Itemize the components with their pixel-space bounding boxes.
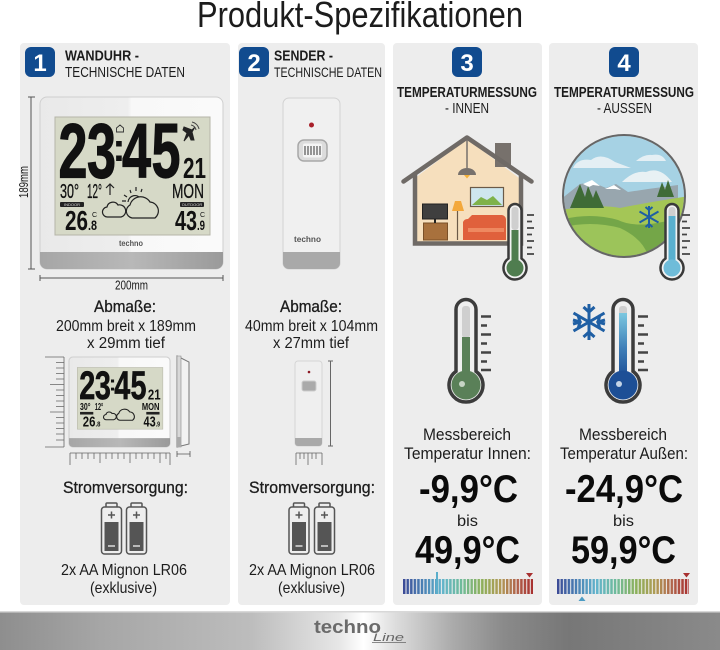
text: dimensions xyxy=(56,297,196,352)
text: battery type: 2x AA Mignon LR06 xyxy=(61,562,187,579)
clock readings: INDOOR xyxy=(64,202,80,207)
clock readings xyxy=(60,181,205,236)
clock readings: .8 xyxy=(88,217,97,233)
logo text on sensor: techno xyxy=(294,235,321,244)
colour scale xyxy=(403,572,533,594)
text: battery type xyxy=(61,562,187,597)
small sensor xyxy=(295,361,322,446)
icon: small thermometer green xyxy=(504,204,534,279)
small clock: 26 xyxy=(83,414,95,430)
icon: batteries xyxy=(102,503,146,554)
clock readings: .9 xyxy=(197,217,205,233)
value: min: -9,9°C xyxy=(419,468,518,511)
panel: Temperatur aussen xyxy=(549,43,698,605)
text: dimensions: x 27mm tief xyxy=(273,335,350,352)
ruler: width xyxy=(70,453,170,465)
small clock: 30° xyxy=(80,401,91,413)
clock readings: MON xyxy=(172,181,204,203)
heading: innen xyxy=(397,84,537,117)
logo text on clock: techno xyxy=(119,239,143,248)
heading: Wanduhr xyxy=(65,48,185,81)
heading: aussen xyxy=(554,84,694,117)
small clock: 3 xyxy=(95,363,111,408)
sensor xyxy=(283,98,340,269)
badge 1: 1 xyxy=(33,50,47,77)
icon: large snowflake xyxy=(573,304,605,340)
small clock: .9 xyxy=(156,420,160,429)
dimension: height xyxy=(28,97,35,269)
icon: landscape xyxy=(562,134,686,258)
wall clock xyxy=(40,97,223,269)
icon: small thermometer blue xyxy=(660,204,690,279)
heading: Wanduhr: WANDUHR - xyxy=(65,48,139,64)
small clock: 5 xyxy=(131,363,147,408)
text: battery type: (exklusive) xyxy=(278,580,345,597)
clock time: : xyxy=(112,126,126,170)
heading: innen: TEMPERATURMESSUNG xyxy=(397,84,537,101)
dimension: width xyxy=(40,275,223,281)
text: measuring range label: Temperatur Außen: xyxy=(560,444,688,463)
icon: small snowflake xyxy=(640,206,658,228)
small clock: 12° xyxy=(95,401,103,413)
small clock: 43 xyxy=(144,414,156,430)
heading: aussen: - AUSSEN xyxy=(597,101,652,117)
small clock: MON xyxy=(142,401,160,413)
dimension: sensor height xyxy=(328,361,333,446)
small clock: 4 xyxy=(114,363,130,408)
heading: Stromversorgung: Stromversorgung: xyxy=(249,478,375,497)
icon: house xyxy=(116,125,124,132)
heading: Sender: TECHNISCHE DATEN xyxy=(274,64,382,80)
dimension: depth xyxy=(177,451,190,457)
text: measuring range label xyxy=(560,425,688,463)
icon: up arrow xyxy=(106,184,114,195)
badge 4: 4 xyxy=(617,50,631,77)
clock time: 3 xyxy=(87,108,116,194)
text: bis: bis xyxy=(457,513,478,530)
panel: Sender xyxy=(238,43,385,605)
footer logo: techno xyxy=(314,616,381,637)
icon: house xyxy=(404,138,532,244)
clock time: 2 xyxy=(58,108,88,194)
text: dimensions: 200mm breit x 189mm xyxy=(56,318,196,335)
footer band xyxy=(0,611,720,650)
text: dimensions: x 29mm tief xyxy=(87,335,166,352)
value: max: 49,9°C xyxy=(415,529,520,572)
vent xyxy=(298,140,327,161)
ruler: sensor width xyxy=(296,453,322,465)
icon: large thermometer green xyxy=(449,300,491,402)
panel: Temperatur innen xyxy=(393,43,542,605)
icon: large thermometer blue xyxy=(606,300,648,402)
clock readings: 26 xyxy=(65,205,88,236)
clock readings: 30° xyxy=(60,181,79,203)
badge 4 xyxy=(609,47,639,77)
text: measuring range label: Messbereich xyxy=(423,425,511,444)
footer logo: Line xyxy=(373,632,404,644)
LED xyxy=(309,122,314,128)
heading: Stromversorgung: Stromversorgung: xyxy=(63,478,188,497)
ruler: height xyxy=(45,357,64,447)
small clock: : xyxy=(109,372,116,395)
text: dimensions: Abmaße: xyxy=(94,297,156,316)
value: min: -24,9°C xyxy=(565,468,683,511)
icon: satellite xyxy=(183,122,199,141)
badge 3: 3 xyxy=(460,50,474,77)
heading: Sender: SENDER - xyxy=(274,48,333,64)
clock readings: C xyxy=(92,212,97,219)
text: measuring range label: Temperatur Innen: xyxy=(404,444,531,463)
text: dimensions xyxy=(245,297,378,352)
text: bis: bis xyxy=(613,513,634,530)
text: battery type: 2x AA Mignon LR06 xyxy=(249,562,375,579)
small clock: .8 xyxy=(95,420,100,429)
heading: Wanduhr: TECHNISCHE DATEN xyxy=(65,64,185,81)
text: dimensions: 40mm breit x 104mm xyxy=(245,318,378,335)
icon: batteries xyxy=(289,503,334,554)
clock time xyxy=(58,108,206,194)
small clock: 2 xyxy=(79,363,95,408)
badge 1 xyxy=(25,47,55,77)
clock readings: 12° xyxy=(87,181,102,203)
heading: innen: - INNEN xyxy=(445,101,489,117)
panel: Wanduhr xyxy=(17,43,230,605)
clock time: 5 xyxy=(152,108,180,194)
small clock xyxy=(69,357,170,447)
badge 2: 2 xyxy=(247,50,261,77)
clock readings: 43 xyxy=(175,205,197,236)
footer logo xyxy=(314,616,406,644)
badge 3 xyxy=(452,47,482,77)
text: battery type xyxy=(249,562,375,597)
dimension label: 189mm: 189mm xyxy=(17,166,31,198)
text: measuring range label xyxy=(404,425,531,463)
text: dimensions: Abmaße: xyxy=(280,297,342,316)
small clock: 21 xyxy=(148,387,161,403)
dimension label: 200mm: 200mm xyxy=(115,278,148,292)
text: measuring range label: Messbereich xyxy=(579,425,667,444)
clock time: 4 xyxy=(122,108,151,194)
heading: Sender xyxy=(274,48,382,80)
icon: weather xyxy=(102,187,158,218)
badge 2 xyxy=(239,47,269,77)
text: battery type: (exklusive) xyxy=(90,580,157,597)
clock time: 21 xyxy=(183,153,206,185)
clock readings: OUTDOOR xyxy=(182,202,202,207)
clock readings: C xyxy=(200,212,205,219)
value: max: 59,9°C xyxy=(571,529,676,572)
side view xyxy=(177,356,189,447)
colour scale xyxy=(557,573,690,601)
